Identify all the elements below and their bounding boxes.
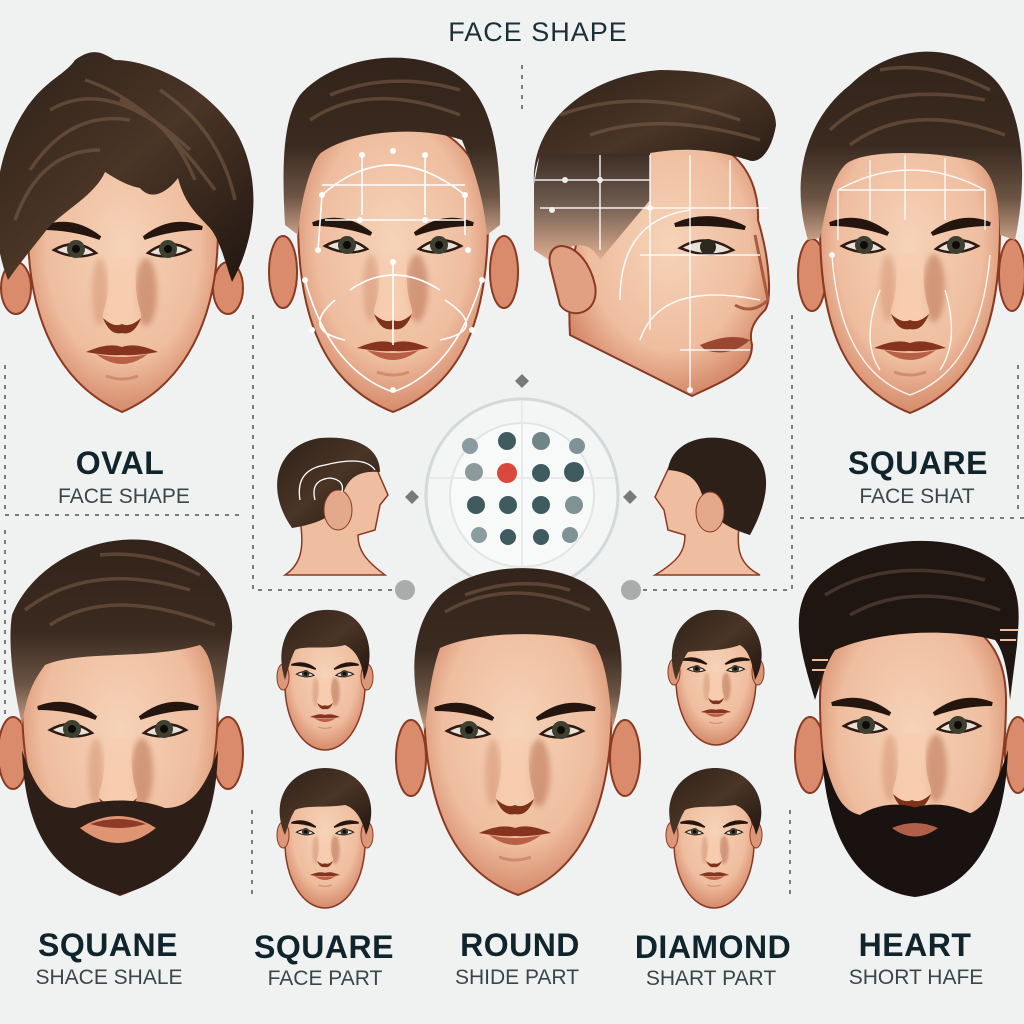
- label: round: [455, 927, 580, 989]
- label: squane: SHACE SHALE: [35, 966, 183, 989]
- label: heart: [849, 927, 983, 989]
- label: square part: SQUARE: [254, 929, 394, 965]
- face: center round: [396, 568, 640, 895]
- small face: lower right: [666, 768, 762, 908]
- label: heart: HEART: [859, 927, 971, 963]
- center dial chart: [426, 399, 618, 606]
- label: square part: [254, 929, 394, 990]
- label: oval: FACE SHAPE: [58, 485, 190, 508]
- small head: left profile: [277, 438, 388, 575]
- face: right top: [798, 52, 1024, 413]
- face mesh: [302, 148, 485, 393]
- label: squane: [35, 927, 183, 989]
- dots: [462, 432, 585, 545]
- label: square: SQUARE: [848, 445, 988, 481]
- label: round: ROUND: [460, 927, 580, 963]
- face: oval: [0, 52, 253, 412]
- label: diamond: [635, 929, 791, 990]
- small face: top right: [668, 610, 764, 745]
- label: oval: OVAL: [76, 445, 164, 481]
- face: profile mapped: [534, 70, 776, 396]
- beard: [22, 750, 218, 895]
- label: heart: SHORT HAFE: [849, 966, 983, 989]
- beard and moustache: [822, 750, 1008, 897]
- label: diamond: SHART PART: [646, 967, 776, 990]
- small head: right profile: [655, 438, 766, 575]
- label: oval: [58, 445, 190, 508]
- fade: [534, 153, 650, 262]
- small face: lower left: [277, 768, 373, 908]
- profile mesh: [535, 155, 768, 393]
- label: square part: FACE PART: [268, 967, 383, 990]
- hair: [0, 52, 253, 282]
- face: bearded left: [0, 540, 243, 895]
- face: mapped front: [269, 58, 518, 412]
- title: FACE SHAPE: [448, 17, 628, 47]
- eye and nose: [675, 218, 768, 352]
- label: square: FACE SHAT: [859, 485, 975, 508]
- face outline: [28, 130, 218, 412]
- small face: top left: [277, 610, 373, 750]
- connector diamonds: [395, 374, 641, 600]
- ears: [1, 262, 243, 314]
- facial features: [42, 224, 202, 379]
- label: round: SHIDE PART: [455, 966, 579, 989]
- label: square: [848, 445, 988, 508]
- label: squane: SQUANE: [38, 927, 178, 963]
- label: diamond: DIAMOND: [635, 929, 791, 965]
- face: bearded right: [795, 541, 1024, 897]
- mesh: [829, 155, 990, 395]
